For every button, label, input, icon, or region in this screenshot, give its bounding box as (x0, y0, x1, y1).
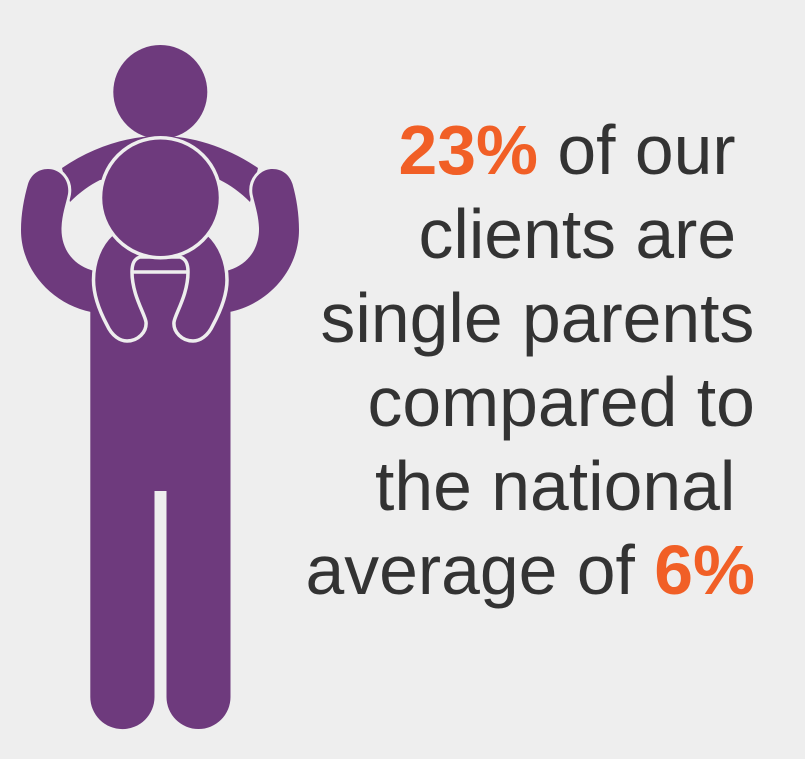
text block: statistic (306, 111, 755, 609)
child waistband line (132, 270, 188, 274)
parent right arm (224, 169, 299, 312)
line: average of 6%: average of 6% (306, 531, 755, 609)
parent torso and legs (90, 255, 230, 729)
line: single parents: single parents (320, 279, 754, 357)
child body and legs (94, 234, 227, 341)
line: compared to: compared to (368, 363, 755, 441)
parent shoulders (62, 136, 258, 202)
parent head (113, 45, 207, 139)
icon: parent carrying child on shoulders (21, 45, 299, 729)
child head (100, 138, 220, 258)
parent left arm (21, 169, 97, 312)
line: clients are: clients are (418, 195, 736, 273)
line: 23% of our: 23% of our (398, 111, 736, 189)
line: the national: the national (375, 447, 735, 525)
